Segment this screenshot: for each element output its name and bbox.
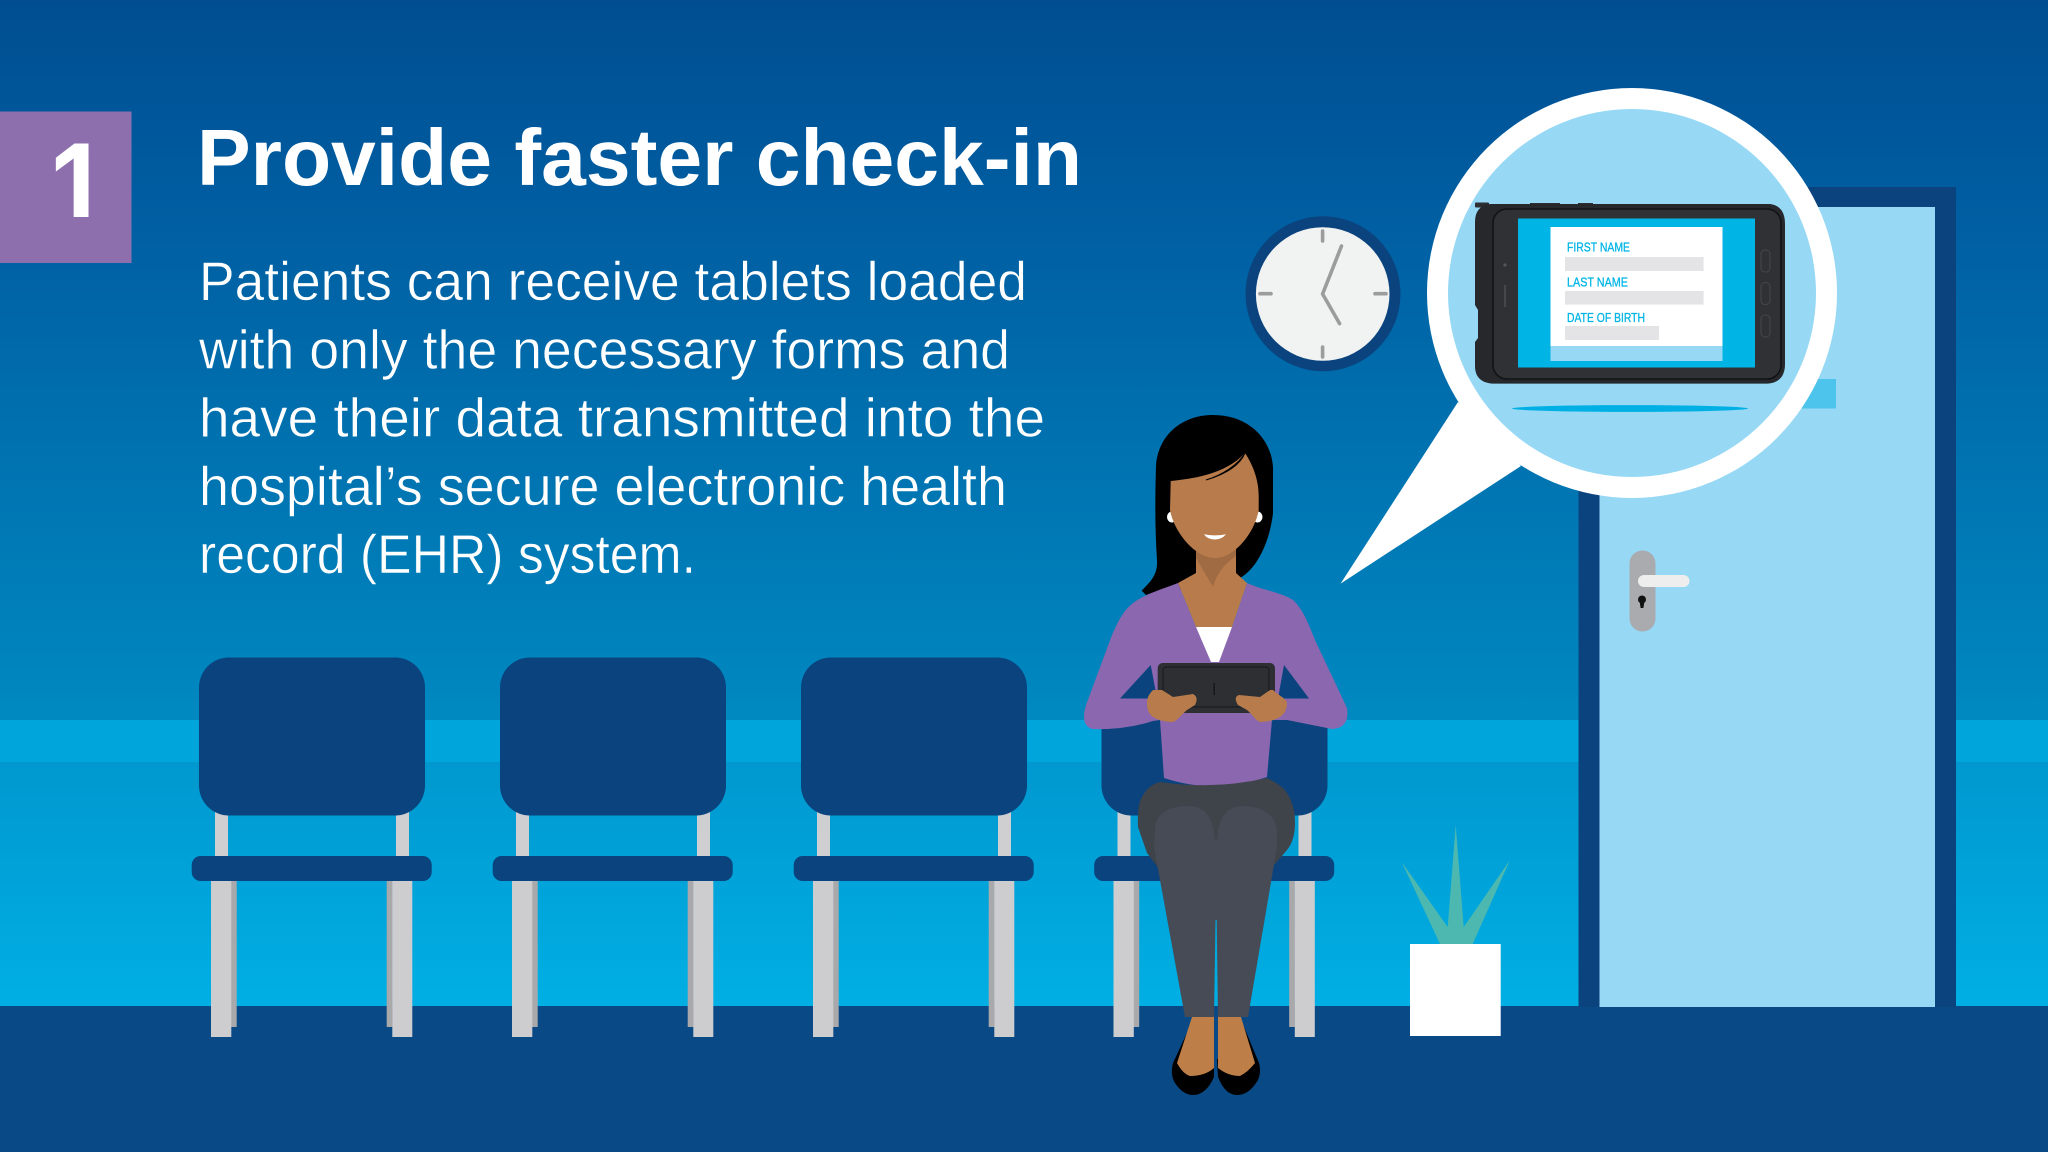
legs [1154,806,1277,1017]
speech bubble [1341,88,1837,584]
woman [1084,415,1347,1095]
tablet with form: LAST NAME [1567,274,1628,290]
earrings [1167,512,1262,522]
chair 1 [192,658,432,1037]
floor [0,1006,2048,1152]
chair 2 [493,658,733,1037]
tablet with form [1475,202,1785,384]
body text: Patients can receive tablets loaded [199,250,1027,312]
chair 4 [1094,658,1334,1037]
right shoe [1217,1017,1260,1095]
hands [1147,690,1287,722]
lap [1138,778,1295,870]
cardigan [1084,583,1347,786]
held tablet [1158,663,1275,713]
tablet with form: DATE OF BIRTH [1567,310,1645,325]
hair [1142,415,1273,595]
chest and shirt [1178,572,1247,662]
neck [1196,540,1236,595]
body text: have their data transmitted into the [199,387,1045,449]
door handle [1630,550,1690,632]
chair 3 [794,658,1034,1037]
face [1170,453,1259,558]
smile [1204,534,1226,540]
title: Provide faster check-in [197,113,1082,202]
plant [1402,825,1510,1036]
number badge: 1 [48,116,109,258]
body text: hospital’s secure electronic health [199,455,1007,517]
tablet shadow [1512,405,1748,412]
clock [1246,216,1400,371]
body text: record (EHR) system. [199,523,696,585]
tablet with form: FIRST NAME [1567,240,1630,254]
left shoe [1172,1017,1214,1095]
body text [198,250,1045,585]
door [1578,187,1956,1007]
body text: with only the necessary forms and [198,318,1010,380]
number badge [0,112,132,263]
hair strand [1206,453,1245,480]
arm gaps [1120,665,1309,698]
